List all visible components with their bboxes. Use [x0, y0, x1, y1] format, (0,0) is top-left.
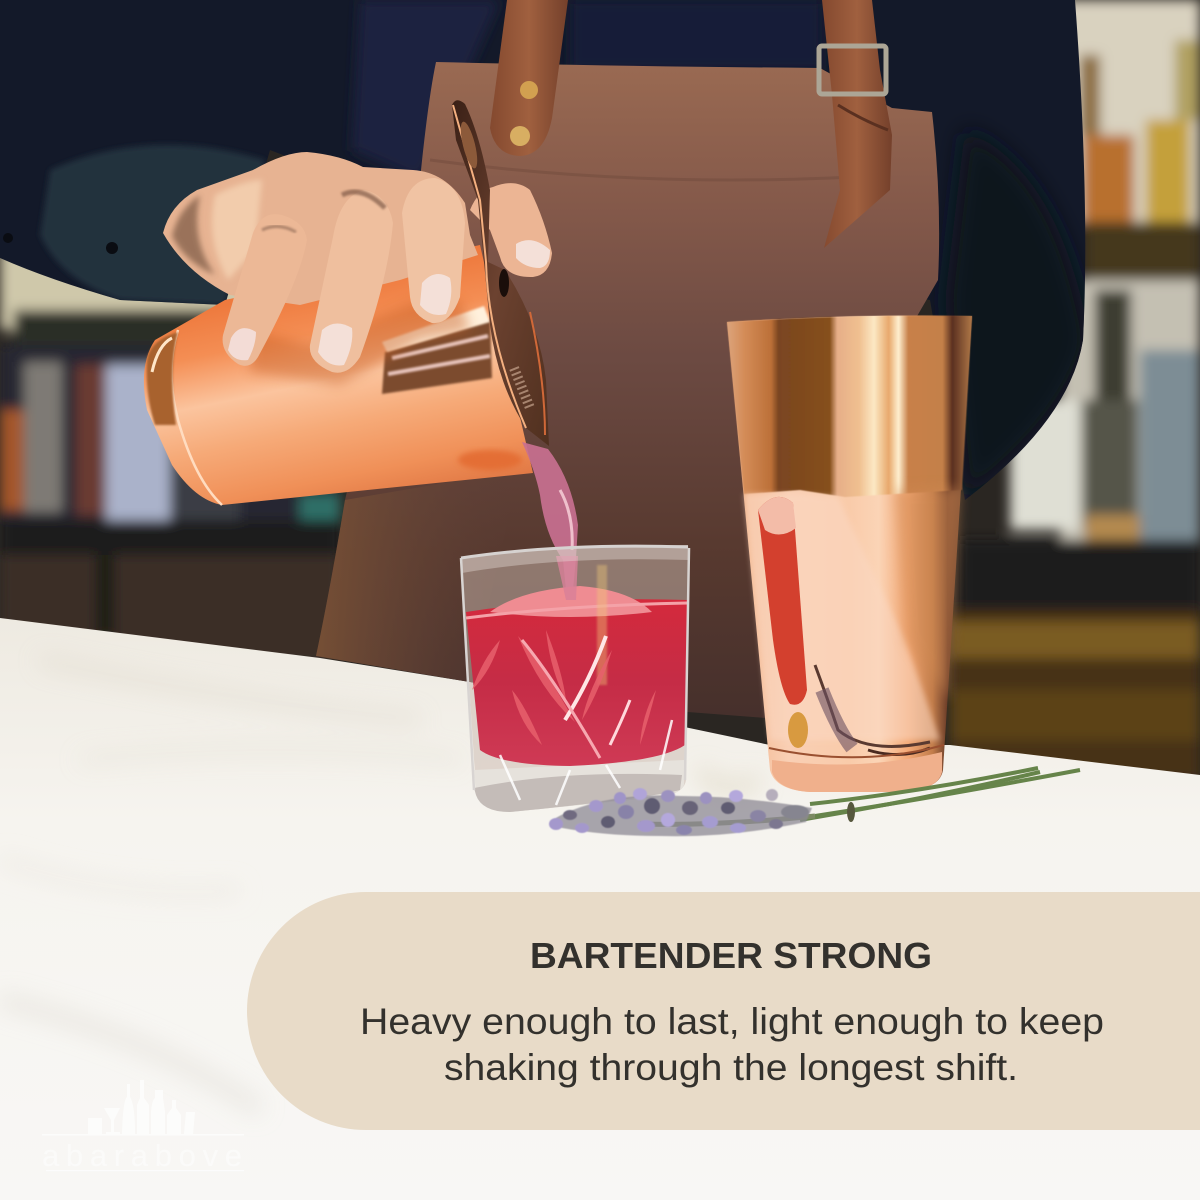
- reflection of glass in tin: [758, 497, 807, 705]
- ice dome: [490, 586, 652, 617]
- reflection of lavender in tin: [815, 665, 930, 755]
- caption body text: Heavy enough to last, light enough to keep: [360, 1001, 1104, 1042]
- caption heading: BARTENDER STRONG: [530, 935, 932, 976]
- index finger: [223, 214, 307, 366]
- standing copper shaker tin: [727, 316, 972, 792]
- tilted copper shaker tin: [144, 245, 533, 505]
- lavender sprig: [549, 768, 1080, 836]
- shirt torso and sleeves: [0, 0, 1090, 500]
- ring finger: [402, 178, 465, 323]
- caption body text: shaking through the longest shift.: [444, 1047, 1018, 1088]
- cocktail glass: [461, 545, 689, 812]
- apron left strap: [490, 0, 568, 156]
- shadow under fingers: [250, 300, 470, 385]
- rim: [461, 545, 689, 573]
- bar strainer on tin: [452, 100, 549, 446]
- cut crystal: [472, 630, 656, 745]
- brand logo watermark: [42, 1080, 244, 1173]
- middle finger: [310, 190, 393, 373]
- hand holding tin: [163, 152, 552, 385]
- pink pour stream: [522, 442, 578, 590]
- logo bottle skyline: [88, 1080, 195, 1134]
- back of hand: [163, 152, 478, 305]
- apron right strap and buckle: [819, 0, 892, 248]
- leather apron: [316, 62, 939, 718]
- marble counter: [0, 618, 1200, 1200]
- background: blurred back bar: [0, 0, 1200, 800]
- caption pill: [247, 892, 1200, 1130]
- little finger: [470, 183, 552, 277]
- brand logo watermark: abarabove: [42, 1138, 242, 1173]
- caption body text: [360, 1001, 1104, 1088]
